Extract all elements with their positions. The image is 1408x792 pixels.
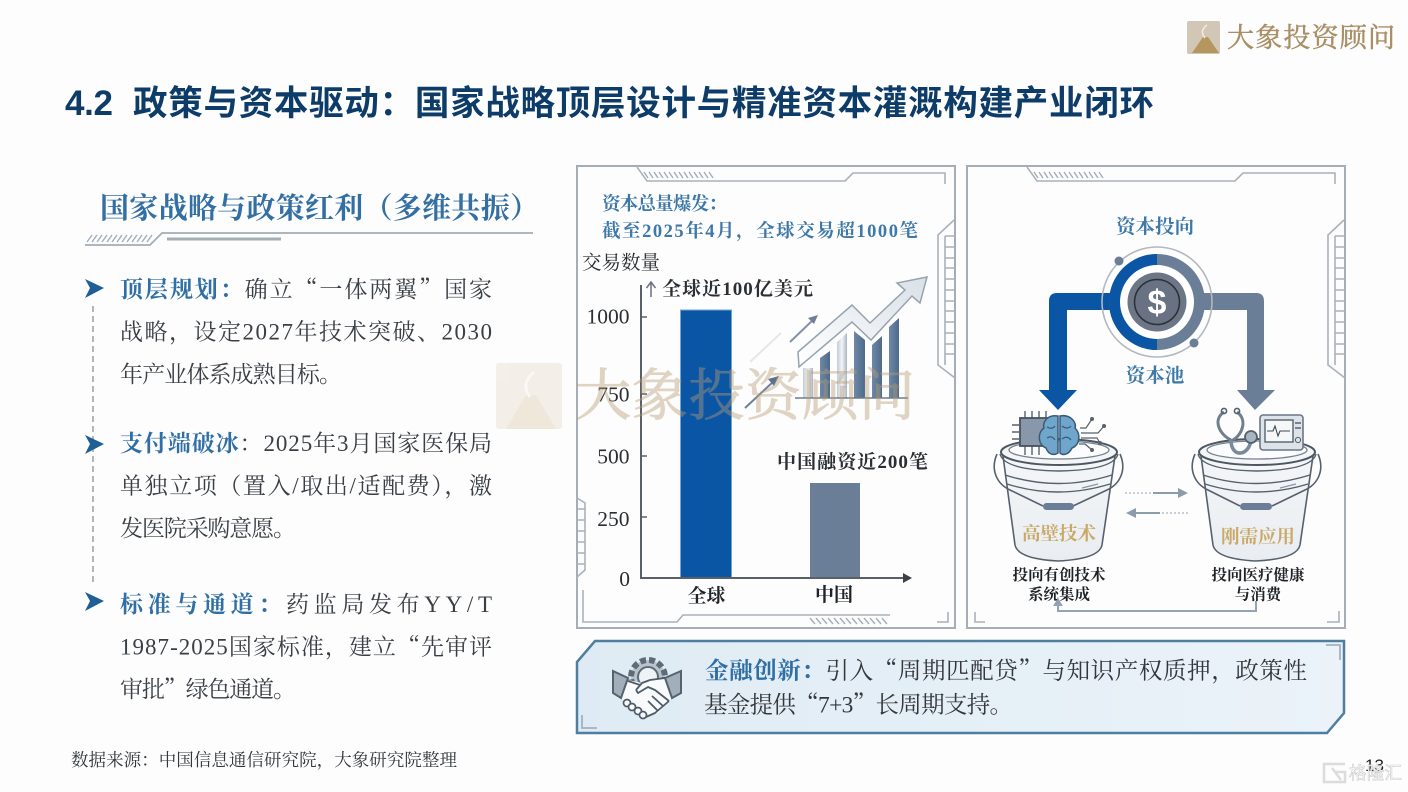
source note: 数据来源：中国信息通信研究院，大象研究院整理 (71, 750, 458, 770)
bullet: top-level planning (85, 271, 492, 387)
label: capital direction: 资本投向 (1116, 215, 1194, 238)
axis tick labels: 1000 (586, 304, 630, 328)
section heading: policy dividends: 国家战略与政策红利（多维共振） (100, 186, 539, 227)
panel: capital allocation diagram (967, 166, 1345, 628)
label: tech investment: 系统集成 (1028, 584, 1090, 604)
panel frame (577, 166, 955, 628)
icon: chip and brain (1012, 411, 1106, 455)
bar: global (680, 310, 732, 578)
label: healthcare investment (1211, 565, 1305, 604)
axis tick labels: 500 (597, 444, 630, 468)
icon: capital ring: $ (1148, 284, 1167, 322)
section heading: policy dividends (85, 186, 539, 245)
label: capital pool: 资本池 (1126, 365, 1185, 387)
icon: chevron arrow (85, 435, 104, 454)
label: healthcare investment: 投向医疗健康 (1211, 565, 1305, 584)
watermark: brand: 大象投资顾问 (575, 366, 915, 428)
icon: stethoscope and monitor (1218, 408, 1303, 453)
axis tick labels: 0 (619, 567, 630, 591)
brand logo: 大象投资顾问 (1227, 23, 1395, 53)
bucket: high-barrier technology (994, 439, 1123, 561)
bullet: standards and channel: 审批”绿色通道。 (120, 671, 296, 704)
icon: capital ring (1102, 247, 1212, 357)
title: 政策与资本驱动：国家战略顶层设计与精准资本灌溉构建产业闭环 (133, 85, 1154, 123)
bullet: payment breakthrough: 支付端破冰：2025年3月国家医保局 (120, 431, 492, 456)
bullet: standards and channel: 标准与通道：药监局发布YY/T (120, 592, 492, 617)
bullet: top-level planning: 顶层规划：确立“一体两翼”国家 (120, 271, 492, 304)
axis tick labels: 750 (597, 382, 630, 406)
callout: financial innovation (577, 641, 1344, 733)
bullet: top-level planning: 年产业体系成熟目标。 (120, 362, 342, 387)
label: healthcare investment: 与消费 (1235, 584, 1283, 604)
chart axes (641, 285, 912, 583)
bullet: payment breakthrough (85, 431, 492, 541)
bullet: payment breakthrough: 单独立项（置入/取出/适配费），激 (120, 474, 492, 500)
axis tick labels (586, 304, 630, 591)
chart heading (602, 190, 918, 242)
arrow: right exchange (1125, 488, 1188, 498)
panel: capital bar chart (577, 166, 955, 628)
axis tick labels: 250 (597, 507, 630, 531)
chart heading: 截至2025年4月，全球交易超1000笔 (602, 220, 918, 242)
category label: global: 全球 (687, 585, 726, 607)
watermark: platform logo (1324, 763, 1402, 783)
bullet: top-level planning: 战略，设定2027年技术突破、2030 (120, 320, 492, 346)
arrow: blue flow (1039, 293, 1115, 410)
bar: China (810, 483, 860, 578)
title: 4.2 (65, 84, 113, 123)
callout: financial innovation: 金融创新：引入“周期匹配贷”与知识产权质押，政策性 (705, 652, 1307, 686)
category label: China: 中国 (815, 584, 853, 606)
arrow: return loop (1053, 598, 1256, 611)
bullet: payment breakthrough: 发医院采购意愿。 (120, 516, 296, 541)
page number: 13 (1365, 756, 1384, 775)
watermark: platform logo: 格隆汇 (1349, 763, 1402, 783)
bullet: standards and channel: 1987-2025国家标准，建立“先审评 (120, 628, 492, 662)
label: tech investment (1012, 565, 1106, 604)
icon: chevron arrow (85, 279, 104, 298)
label: tech investment: 投向有创技术 (1012, 565, 1106, 584)
bucket: essential applications: 刚需应用 (1221, 526, 1295, 548)
timeline dashed connector (92, 306, 94, 585)
icon: gear and handshake (613, 660, 681, 718)
arrow: left exchange (1126, 508, 1188, 518)
bucket: essential applications (1192, 439, 1321, 561)
data label: global: 全球近100亿美元 (662, 277, 813, 300)
arrow: gray flow (1200, 293, 1275, 410)
growth illustration (745, 277, 927, 408)
data label: China: 中国融资近200笔 (777, 451, 928, 473)
panel frame (967, 166, 1345, 628)
icon: chevron arrow (85, 592, 104, 611)
bullet: standards and channel (85, 592, 492, 704)
y axis title: 交易数量 (582, 252, 660, 274)
bucket: high-barrier technology: 高壁技术 (1022, 523, 1096, 545)
callout: financial innovation: 基金提供“7+3”长周期支持。 (704, 686, 1013, 720)
chart heading: 资本总量爆发： (602, 190, 727, 216)
